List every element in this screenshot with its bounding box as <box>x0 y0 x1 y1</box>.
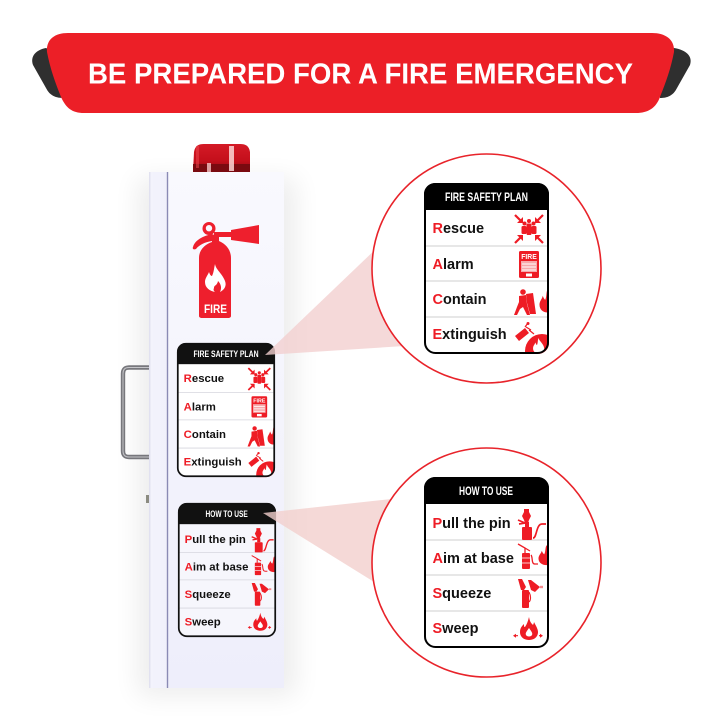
cabinet body <box>146 172 284 688</box>
panel: how to use label on cabinet: Squeeze <box>185 589 231 601</box>
panel: how to use label on cabinet: Sweep <box>185 616 221 628</box>
panel: fire safety plan label on cabinet: Rescue <box>184 373 224 385</box>
beacon light <box>193 144 250 172</box>
cabinet soft shadow <box>138 178 296 696</box>
banner red body <box>47 33 674 113</box>
panel: how to use label on cabinet: HOW TO USE <box>205 509 248 519</box>
banner: title ribbon <box>32 33 691 113</box>
extinguisher label: FIRE <box>204 302 227 316</box>
panel: how to use label on cabinet <box>178 503 280 637</box>
panel: how to use enlarged <box>424 477 555 648</box>
callout circle: fire safety plan <box>372 154 601 383</box>
panel: how to use enlarged: Squeeze <box>432 586 491 602</box>
header <box>424 183 549 210</box>
panel: fire safety plan enlarged <box>424 183 549 354</box>
panel: fire safety plan enlarged: Contain <box>432 292 486 308</box>
cabinet side strip <box>149 172 168 688</box>
panel: how to use enlarged: Sweep <box>432 621 479 637</box>
door handle highlight <box>123 368 149 457</box>
callout beam: fire safety plan <box>265 245 420 355</box>
panel: fire safety plan enlarged: Extinguish <box>432 327 507 343</box>
door handle <box>123 368 149 457</box>
panel: fire safety plan enlarged: Alarm <box>432 257 474 273</box>
rows: Rescue <box>432 221 484 237</box>
panel: how to use enlarged: Aim at base <box>432 551 514 567</box>
banner left tail <box>32 48 70 98</box>
banner right tail <box>650 48 691 98</box>
callout circle: how to use <box>372 448 601 677</box>
panel: fire safety plan label on cabinet: Extinguish <box>184 456 242 468</box>
icon: fire extinguisher logo <box>193 222 259 318</box>
cabinet front face <box>168 172 284 688</box>
rows: Pull the pin <box>432 516 511 532</box>
panel: fire safety plan enlarged: FIRE SAFETY PLAN <box>445 192 528 204</box>
hinge screw <box>146 495 149 503</box>
panel: fire safety plan label on cabinet <box>176 342 276 478</box>
header <box>424 477 549 504</box>
callout beam: how to use <box>263 498 400 598</box>
panel: fire safety plan label on cabinet: Contain <box>184 429 226 441</box>
panel: fire safety plan label on cabinet: Alarm <box>184 401 216 413</box>
panel: how to use label on cabinet: Aim at base <box>185 561 248 573</box>
extinguisher flame <box>205 264 226 292</box>
panel: fire safety plan label on cabinet: FIRE SAFETY PLAN <box>193 349 259 359</box>
panel: how to use enlarged: HOW TO USE <box>459 486 513 498</box>
panel: how to use label on cabinet: Pull the pin <box>185 534 246 546</box>
title text: BE PREPARED FOR A FIRE EMERGENCY <box>88 58 633 90</box>
